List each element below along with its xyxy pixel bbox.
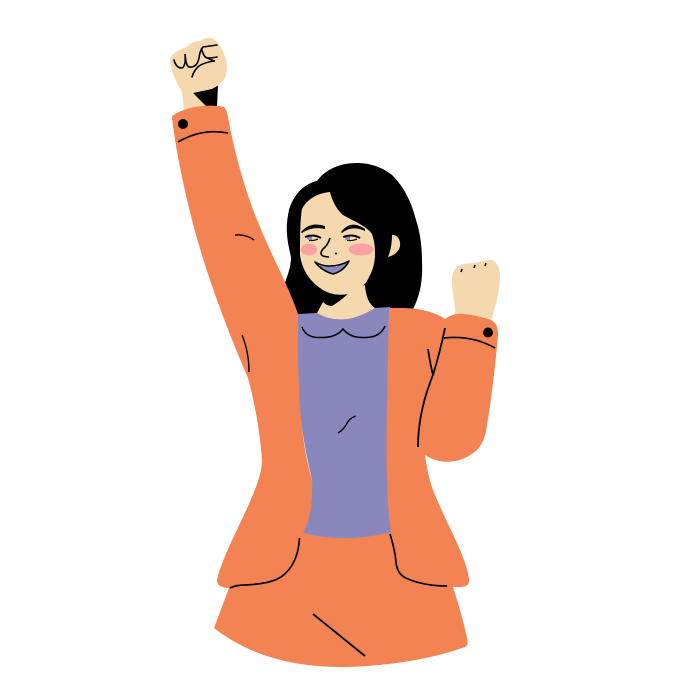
blouse xyxy=(298,307,391,538)
face xyxy=(300,192,400,295)
cheeks xyxy=(301,244,374,256)
mouth xyxy=(315,261,349,274)
right pocket line xyxy=(390,534,447,586)
eyes xyxy=(305,235,360,241)
right cuff line xyxy=(444,337,495,348)
left pocket line xyxy=(230,538,300,588)
collar line xyxy=(302,326,385,338)
right jacket and sleeve xyxy=(386,308,498,587)
raised fist xyxy=(170,38,227,110)
hair xyxy=(285,163,422,316)
sleeve creases xyxy=(235,235,254,372)
right fist xyxy=(452,260,500,324)
right sleeve seam xyxy=(418,328,445,447)
left cuff line xyxy=(178,132,228,142)
skirt xyxy=(214,525,468,667)
nose xyxy=(321,238,337,257)
right cuff button xyxy=(483,328,493,338)
knuckle marks xyxy=(461,263,486,272)
eyebrows xyxy=(301,224,365,233)
skirt fold line xyxy=(313,614,365,656)
fist finger lines xyxy=(174,45,217,77)
blouse crease xyxy=(338,416,356,433)
left cuff button xyxy=(178,119,188,129)
raised arm and left jacket xyxy=(172,106,312,588)
ear xyxy=(388,235,400,257)
neck xyxy=(317,285,375,319)
